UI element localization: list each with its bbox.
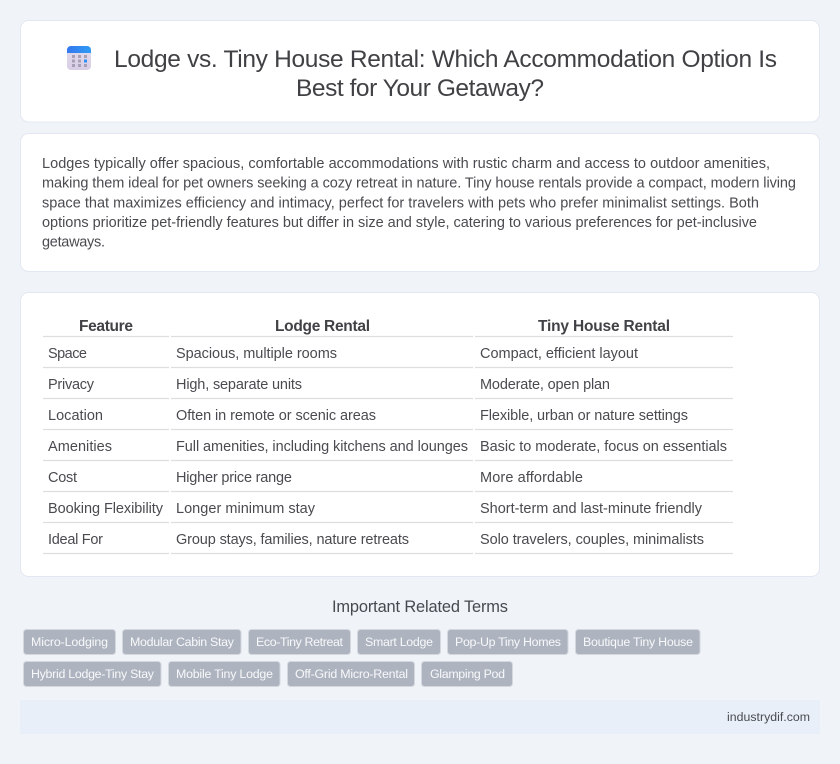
- row: location: Often in remote or scenic areas: [176, 408, 376, 424]
- row: ideal for: Ideal For: [48, 532, 103, 548]
- row: ideal for: Solo travelers, couples, minimalists: [480, 532, 704, 548]
- row: privacy: High, separate units: [176, 377, 302, 393]
- chip: [422, 662, 512, 686]
- chip: [576, 630, 700, 654]
- title: Best for Your Getaway?: [296, 75, 544, 102]
- chip: [358, 630, 440, 654]
- heading: related terms: Important Related Terms: [332, 598, 508, 616]
- row: amenities: Basic to moderate, focus on essentials: [480, 439, 727, 455]
- row: booking flexibility: Short-term and last-minute friendly: [480, 501, 703, 517]
- title: Lodge vs. Tiny House Rental: Which Accommodation Option Is: [114, 46, 777, 73]
- table header row: Feature: [79, 318, 133, 335]
- icon: calendar: [67, 46, 91, 70]
- intro paragraph: Lodges typically offer spacious, comfortable accommodations with rustic charm and access to outdoor amenities,: [42, 156, 770, 172]
- chip: Glamping Pod: [430, 667, 505, 681]
- chip: Boutique Tiny House: [583, 635, 693, 649]
- footer: [20, 700, 820, 734]
- row: booking flexibility: Longer minimum stay: [176, 501, 316, 517]
- row: space: [48, 346, 638, 362]
- chip: Hybrid Lodge-Tiny Stay: [31, 667, 155, 681]
- row: amenities: Full amenities, including kitchens and lounges: [176, 439, 468, 455]
- intro paragraph: options prioritize pet-friendly features but differ in size and style, catering to various preferences for pet-inclusive: [42, 215, 757, 231]
- intro paragraph: getaways.: [42, 234, 105, 250]
- chip: Modular Cabin Stay: [130, 635, 235, 649]
- row: space: Space: [48, 346, 87, 362]
- row: location: Location: [48, 408, 103, 424]
- row: space: Spacious, multiple rooms: [176, 346, 337, 362]
- row: cost: [48, 470, 583, 486]
- chip: Pop-Up Tiny Homes: [455, 635, 561, 649]
- chip: Smart Lodge: [365, 635, 433, 649]
- row: privacy: [48, 377, 610, 393]
- table header row: [79, 318, 670, 335]
- table header row: Lodge Rental: [275, 318, 370, 335]
- row: booking flexibility: [48, 501, 703, 517]
- row: amenities: [48, 439, 727, 455]
- row: privacy: Privacy: [48, 377, 95, 393]
- panel: intro text: [20, 134, 820, 272]
- chip: [448, 630, 568, 654]
- row: location: [48, 408, 688, 424]
- intro paragraph: [42, 156, 796, 250]
- chip: Eco-Tiny Retreat: [256, 635, 344, 649]
- related term chips: [24, 630, 700, 686]
- chip: [168, 662, 280, 686]
- panel: title header: [20, 20, 820, 122]
- title: [114, 46, 777, 102]
- chip: [288, 662, 414, 686]
- chip: [24, 662, 161, 686]
- intro paragraph: space that maximizes efficiency and intimacy, perfect for travelers with pets who prefer minimalist settings. Both: [42, 196, 759, 212]
- intro paragraph: making them ideal for pet owners seeking a cozy retreat in nature. Tiny house rentals provide a compact, modern living: [42, 176, 796, 192]
- row: cost: Cost: [48, 470, 77, 486]
- chip: Off-Grid Micro-Rental: [295, 667, 408, 681]
- row: cost: Higher price range: [176, 470, 292, 486]
- chip: Mobile Tiny Lodge: [176, 667, 273, 681]
- row: cost: More affordable: [480, 470, 583, 486]
- row: privacy: Moderate, open plan: [480, 377, 610, 393]
- chip: [248, 630, 350, 654]
- row: location: Flexible, urban or nature settings: [480, 408, 688, 424]
- row: ideal for: [48, 532, 704, 548]
- chip: [122, 630, 241, 654]
- row: amenities: Amenities: [48, 439, 112, 455]
- row: booking flexibility: Booking Flexibility: [48, 501, 164, 517]
- row: space: Compact, efficient layout: [480, 346, 638, 362]
- table header row: Tiny House Rental: [538, 318, 670, 335]
- chip: Micro-Lodging: [31, 635, 108, 649]
- chip: [24, 630, 116, 654]
- panel: comparison table: [20, 292, 820, 576]
- footer: industrydif.com: [727, 710, 810, 724]
- row: ideal for: Group stays, families, nature retreats: [176, 532, 409, 548]
